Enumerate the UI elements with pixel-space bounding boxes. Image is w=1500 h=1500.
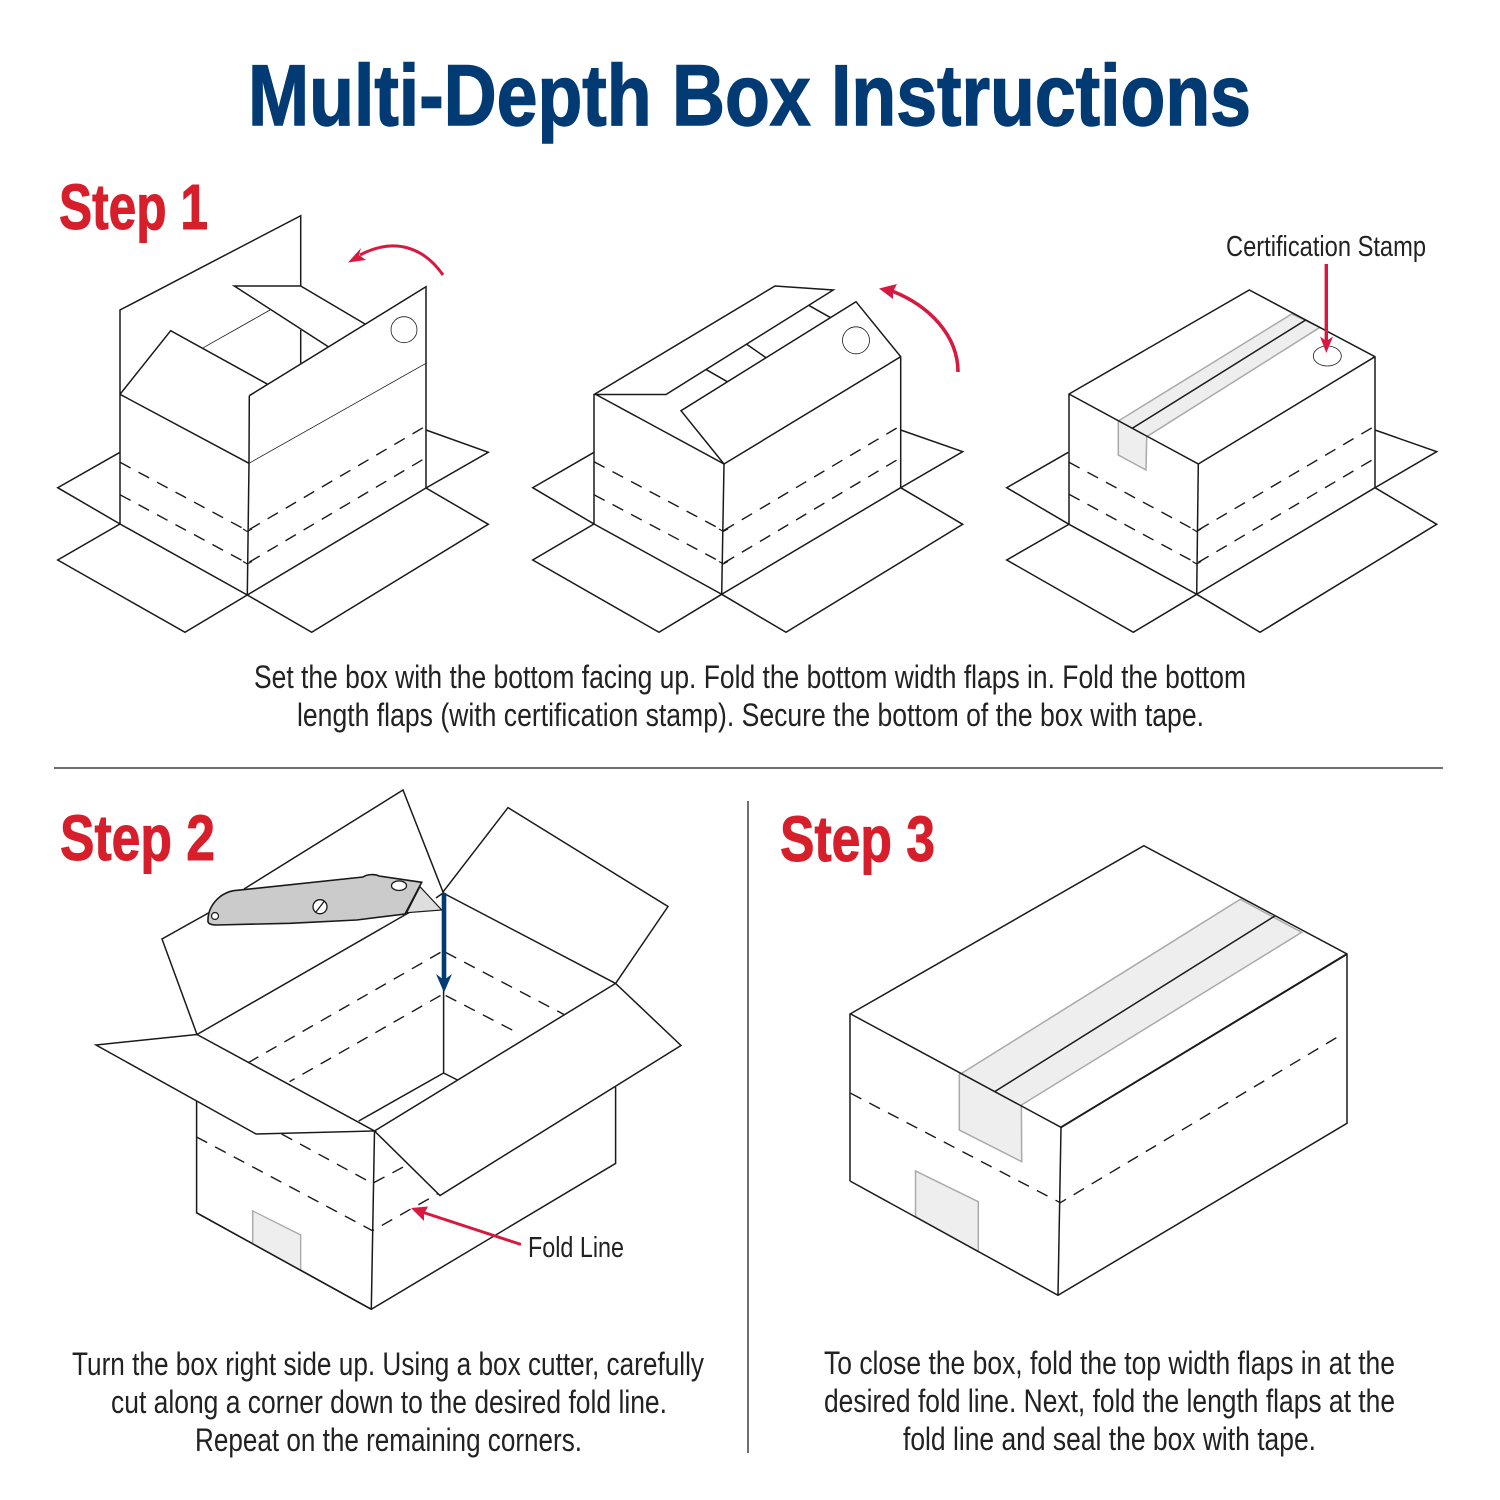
icon: certification stamp circle (842, 327, 870, 354)
box body (197, 1087, 616, 1309)
arrow: pointing to fold line (411, 1206, 521, 1244)
illustration: closed and taped box, step 3 (850, 846, 1347, 1295)
illustration: box with flaps open, step 1 first stage (58, 216, 488, 632)
box opening (197, 892, 616, 1121)
step 3 description: desired fold line. Next, fold the length flaps at the (824, 1383, 1395, 1419)
bottom flaps (533, 430, 963, 632)
fold lines, dashed (594, 426, 901, 563)
icon: certification stamp circle (391, 317, 417, 343)
heading: step 3: Step 3 (780, 803, 935, 875)
callout: certification stamp label: Certification Stamp (1226, 231, 1426, 263)
outer fold lines, dashed (197, 1134, 438, 1231)
step 2 description (72, 1346, 704, 1458)
arrow: fold flap direction, step 1 first stage (348, 246, 443, 275)
heading: step 1: Step 1 (59, 171, 208, 243)
top flaps (162, 790, 668, 1034)
arrow: cut direction (436, 893, 452, 992)
callout: fold line label: Fold Line (528, 1232, 624, 1264)
box outline (850, 846, 1347, 1295)
step 1 description: Set the box with the bottom facing up. Fold the bottom width flaps in. Fold the bottom (254, 659, 1246, 695)
inner fold lines, dashed (248, 952, 564, 1082)
fold lines, dashed (1069, 426, 1375, 563)
icon: box cutter (208, 875, 442, 925)
illustration: taped box bottom, step 1 third stage (1007, 290, 1437, 632)
title: Multi-Depth Box Instructions (248, 48, 1251, 144)
step 3 description: To close the box, fold the top width flaps in at the (824, 1345, 1395, 1381)
step 1 description: length flaps (with certification stamp). Secure the bottom of the box with tape. (297, 697, 1204, 733)
step 2 description: Turn the box right side up. Using a box cutter, carefully (72, 1346, 704, 1382)
fold lines, dashed (120, 426, 426, 563)
certification stamp ellipse (1313, 346, 1341, 366)
illustration: open box with cutter, step 2 (96, 790, 681, 1309)
step 3 description: fold line and seal the box with tape. (903, 1421, 1316, 1457)
label patch (253, 1211, 301, 1270)
step 3 description (824, 1345, 1395, 1457)
bottom flaps (1007, 430, 1437, 632)
tape (959, 899, 1302, 1162)
bottom flaps (58, 430, 488, 632)
fold lines, dashed (851, 1033, 1344, 1203)
step 1 description (254, 659, 1246, 733)
arrow: fold flap direction, step 1 second stage (879, 284, 958, 372)
illustration: box with width flaps folded, step 1 second stage (533, 286, 963, 632)
label patch (916, 1171, 978, 1252)
arrow: pointing to certification stamp (1320, 264, 1333, 353)
heading: step 2: Step 2 (60, 802, 215, 874)
step 2 description: Repeat on the remaining corners. (195, 1422, 582, 1458)
front flaps (96, 1034, 374, 1134)
step 2 description: cut along a corner down to the desired fold line. (111, 1384, 667, 1420)
tape (1118, 314, 1320, 470)
